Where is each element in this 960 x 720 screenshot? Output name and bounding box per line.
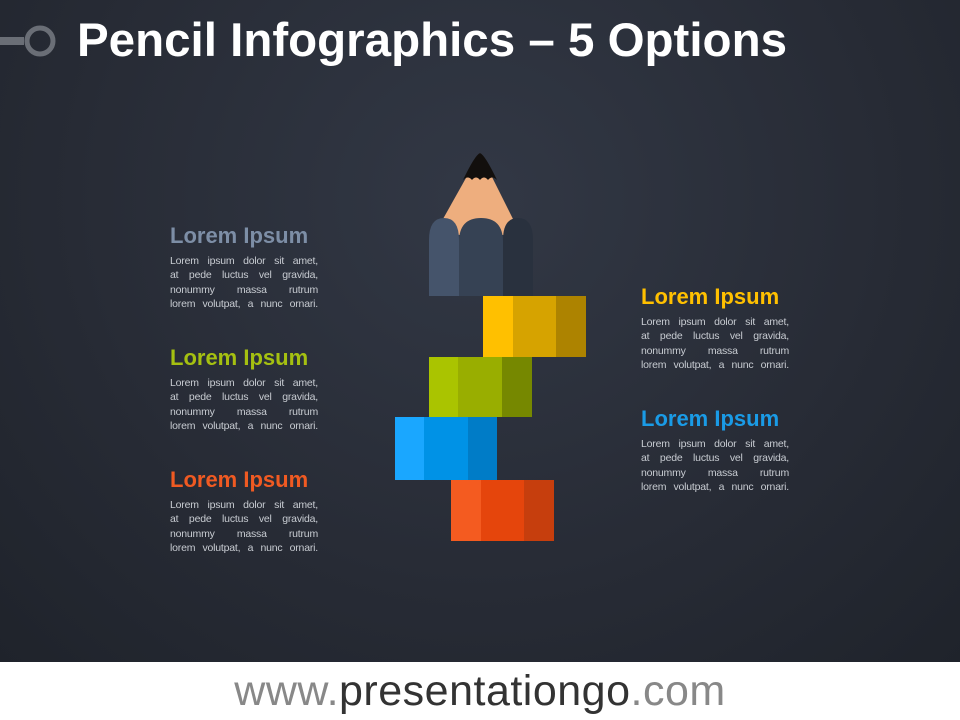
text: option 4: lorem volutpat, a nunc ornari. [641, 359, 789, 371]
text: option 3: nonummy massa rutrum [170, 528, 318, 540]
text: option 1: Lorem ipsum dolor sit amet, [170, 255, 318, 267]
text: option 5: Lorem ipsum dolor sit amet, [641, 438, 789, 450]
text: option 4: at pede luctus vel gravida, [641, 330, 789, 342]
text: option 2: Lorem ipsum dolor sit amet, [170, 377, 318, 389]
text: option 1: Lorem Ipsum [170, 223, 308, 248]
text: option 2 [170, 345, 318, 432]
text: option 1: nonummy massa rutrum [170, 284, 318, 296]
footer [0, 662, 960, 720]
pencil segment: orange [451, 480, 554, 541]
title: Pencil Infographics – 5 Options [77, 14, 787, 67]
text: option 2: Lorem Ipsum [170, 345, 308, 370]
text: option 5 [641, 406, 789, 493]
text: option 4: nonummy massa rutrum [641, 345, 789, 357]
text: option 4 [641, 284, 789, 371]
text: option 3: at pede luctus vel gravida, [170, 513, 318, 525]
text: option 3: Lorem Ipsum [170, 467, 308, 492]
pencil segment: yellow [483, 296, 586, 357]
text: option 5: lorem volutpat, a nunc ornari. [641, 481, 789, 493]
pencil segment: green [429, 357, 532, 417]
text: option 1: at pede luctus vel gravida, [170, 269, 318, 281]
icon: pin [0, 26, 56, 56]
text: option 1 [170, 223, 318, 310]
text: option 5: nonummy massa rutrum [641, 467, 789, 479]
text: option 5: at pede luctus vel gravida, [641, 452, 789, 464]
text: option 2: lorem volutpat, a nunc ornari. [170, 420, 318, 432]
text: option 3 [170, 467, 318, 554]
text: option 3: Lorem ipsum dolor sit amet, [170, 499, 318, 511]
footer: www.presentationgo.com [234, 667, 726, 715]
text: option 1: lorem volutpat, a nunc ornari. [170, 298, 318, 310]
text: option 3: lorem volutpat, a nunc ornari. [170, 542, 318, 554]
pencil segment: blue [395, 417, 497, 480]
text: option 2: at pede luctus vel gravida, [170, 391, 318, 403]
pencil tip [429, 153, 529, 296]
text: option 5: Lorem Ipsum [641, 406, 779, 431]
text: option 2: nonummy massa rutrum [170, 406, 318, 418]
text: option 4: Lorem ipsum dolor sit amet, [641, 316, 789, 328]
text: option 4: Lorem Ipsum [641, 284, 779, 309]
